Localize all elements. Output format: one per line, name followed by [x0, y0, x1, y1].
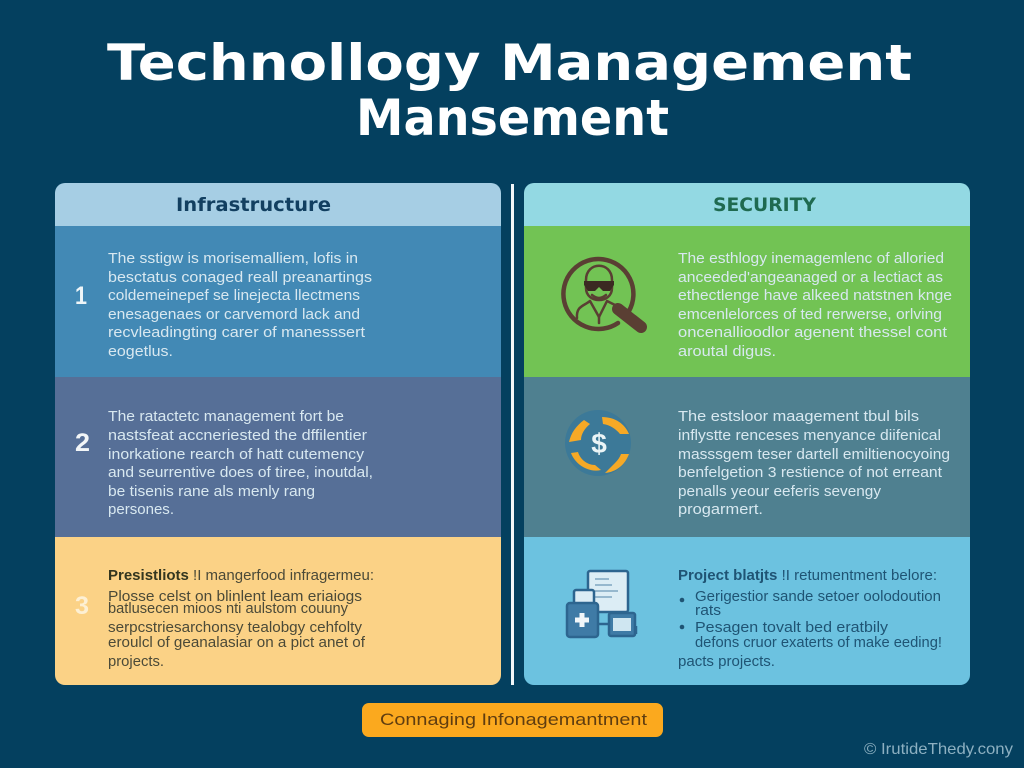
- row 3 text: rats: [695, 603, 721, 619]
- row 3 text: Gerigestior sande setoer oolodoution: [695, 589, 941, 605]
- row 3 text: defons cruor exaterts of make eeding!: [695, 635, 942, 651]
- row 1 text: eogetlus.: [108, 344, 173, 360]
- row 1 text: recvleadingting carer of manesssert: [108, 325, 365, 341]
- row 2 text: The estsloor maagement tbul bils: [678, 409, 919, 425]
- heading: security: SECURITY: [713, 194, 816, 216]
- title: Technollogy Management: [107, 34, 912, 92]
- row 1 text: anceeded'angeanaged or a lectiact as: [678, 270, 943, 286]
- row 3 text: eroulcl of geanalasiar on a pict anet of: [108, 635, 366, 651]
- row 3 text: serpcstriesarchonsy tealobgy cehfolty: [108, 620, 363, 636]
- footer button: Connaging Infonagemantment: [380, 710, 647, 729]
- row 3 text: Pesagen tovalt bed eratbily: [695, 620, 889, 636]
- row 1 text: The esthlogy inemagemlenc of alloried: [678, 251, 944, 267]
- row 1 text: [678, 251, 952, 360]
- icon: person in magnifying glass: [563, 259, 641, 329]
- row 2 text: [678, 409, 950, 518]
- center divider: [511, 184, 514, 685]
- row 3 text: [678, 568, 942, 670]
- row 1 text: The sstigw is morisemalliem, lofis in: [108, 251, 358, 267]
- row 2 text: [108, 409, 373, 518]
- row 1 text: enesagenaes or carvemord lack and: [108, 307, 360, 323]
- panel: security: [524, 183, 970, 685]
- row 3 number: 3: [75, 592, 89, 620]
- row 3 text: Presistliots !I mangerfood infragermeu:: [108, 568, 374, 584]
- title: [107, 34, 912, 147]
- row 1 text: [108, 251, 372, 360]
- row 2 text: inflystte renceses menyance diifenical: [678, 428, 941, 444]
- panel: infrastructure: [55, 183, 501, 685]
- row 2 number: 2: [75, 429, 90, 457]
- row 1 text: coldemeinepef se linejecta llectmens: [108, 288, 360, 304]
- row 2 text: and seurrentive does of tiree, inoutdal,: [108, 465, 373, 481]
- icon: dollar coin: $: [591, 428, 607, 459]
- row 3 text: batlusecen mioos nti aulstom couuny: [108, 601, 349, 617]
- row 3 text: projects.: [108, 654, 164, 670]
- heading: infrastructure: Infrastructure: [176, 194, 331, 216]
- row 2 text: benfelgetion 3 restience of not erreant: [678, 465, 942, 481]
- row 1 text: ethectlenge have alkeed natstnen knge: [678, 288, 952, 304]
- row 3 text: [108, 568, 374, 670]
- row 3 text: Plosse celst on blinlent leam eriaiogs: [108, 589, 362, 605]
- icon: dollar coin: [565, 410, 631, 476]
- row 2 text: nastsfeat accneriested the dffilentier: [108, 428, 367, 444]
- credit: © IrutideThedy.cony: [864, 741, 1013, 758]
- row 1 text: emcenlelorces of ted rerwerse, orlving: [678, 307, 942, 323]
- row 2 text: inorkatione rearch of hatt cutemency: [108, 447, 365, 463]
- row 1 text: oncenallioodlor agenent thessel cont: [678, 325, 947, 341]
- row 1 text: besctatus conaged reall preanartings: [108, 270, 372, 286]
- icon: documents and devices: [567, 571, 636, 637]
- row 1 number: 1: [75, 282, 87, 310]
- row 2 text: progarmert.: [678, 502, 763, 518]
- row 3 text: pacts projects.: [678, 654, 775, 670]
- row 2 text: penalls yeour eeferis sevengy: [678, 484, 882, 500]
- row 2 text: masssgem teser dartell emiltienocyoing: [678, 447, 950, 463]
- row 2 text: The ratactetc management fort be: [108, 409, 344, 425]
- row 2 text: be tisenis rane als menly rang: [108, 484, 315, 500]
- row 2 text: persones.: [108, 502, 174, 518]
- footer button: [362, 703, 663, 737]
- row 1 text: aroutal digus.: [678, 344, 776, 360]
- title: Mansement: [356, 89, 669, 147]
- row 3 text: Project blatjts !I retumentment belore:: [678, 568, 937, 584]
